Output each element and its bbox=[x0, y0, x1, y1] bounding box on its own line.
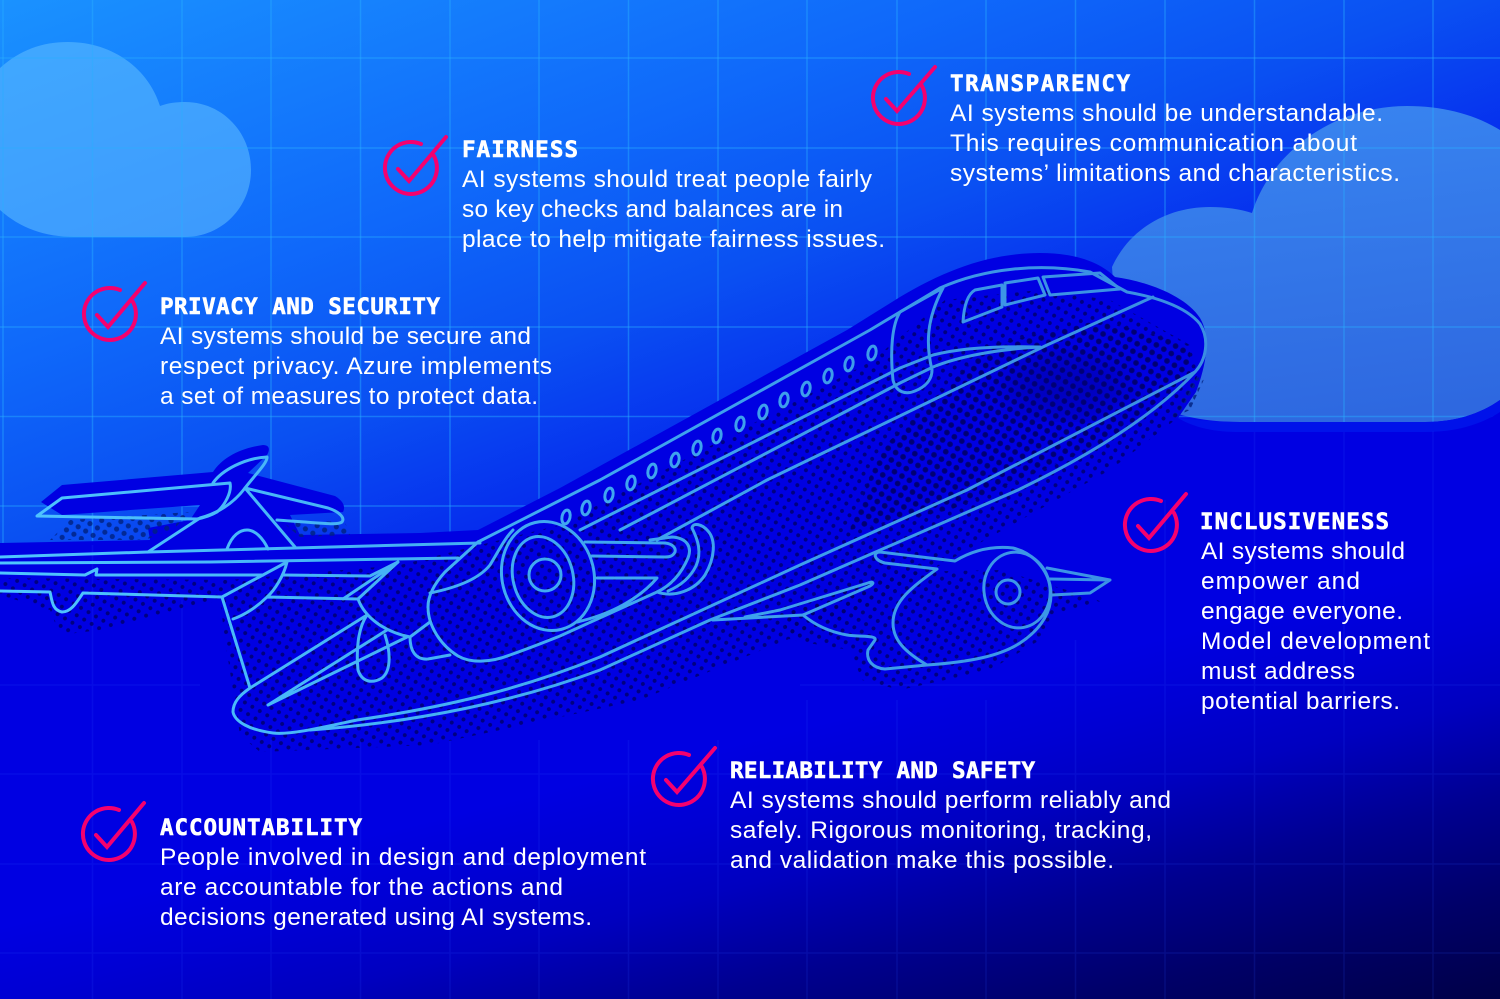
icon: check mark bbox=[1125, 494, 1186, 551]
text block: AI systems should perform reliably and bbox=[730, 787, 1171, 814]
right engine bbox=[875, 547, 1110, 665]
text block: must address bbox=[1201, 658, 1355, 685]
item: privacy and security bbox=[84, 283, 552, 410]
fuselage stringers bbox=[580, 297, 1153, 540]
text block: decisions generated using AI systems. bbox=[160, 904, 592, 931]
heading: PRIVACY AND SECURITY bbox=[160, 294, 440, 320]
cockpit windows bbox=[963, 273, 1120, 322]
text block: systems’ limitations and characteristics. bbox=[950, 160, 1400, 187]
airplane line drawing bbox=[0, 268, 1206, 733]
text block bbox=[160, 323, 552, 410]
halftone shadow bbox=[0, 290, 1206, 752]
text block bbox=[1201, 538, 1430, 715]
cloud: right bbox=[1112, 106, 1500, 422]
text block: respect privacy. Azure implements bbox=[160, 353, 552, 380]
icon: check mark bbox=[84, 283, 145, 340]
heading: TRANSPARENCY bbox=[950, 71, 1130, 97]
text block: place to help mitigate fairness issues. bbox=[462, 226, 885, 253]
passenger windows bbox=[561, 345, 877, 525]
icon: check mark bbox=[385, 137, 446, 194]
icon: check mark bbox=[83, 803, 144, 860]
item: inclusiveness bbox=[1125, 494, 1430, 715]
wing flap bbox=[713, 582, 927, 669]
tail bbox=[37, 457, 343, 552]
item: fairness bbox=[385, 137, 885, 253]
item: accountability bbox=[83, 803, 646, 931]
text block: AI systems should bbox=[1201, 538, 1405, 565]
lower hull lines bbox=[233, 372, 1195, 733]
heading: ACCOUNTABILITY bbox=[160, 815, 362, 841]
heading: FAIRNESS bbox=[462, 137, 578, 163]
heading: INCLUSIVENESS bbox=[1200, 509, 1389, 535]
text block: People involved in design and deployment bbox=[160, 844, 646, 871]
text block: safely. Rigorous monitoring, tracking, bbox=[730, 817, 1152, 844]
text block: AI systems should be understandable. bbox=[950, 100, 1383, 127]
text block: are accountable for the actions and bbox=[160, 874, 563, 901]
fuselage top line and nose bbox=[478, 268, 1206, 542]
left engine bbox=[428, 512, 713, 661]
text block: AI systems should be secure and bbox=[160, 323, 531, 350]
text block: a set of measures to protect data. bbox=[160, 383, 538, 410]
text block bbox=[730, 787, 1171, 874]
text block: AI systems should treat people fairly bbox=[462, 166, 873, 193]
heading: RELIABILITY AND SAFETY bbox=[730, 758, 1035, 784]
text block: Model development bbox=[1201, 628, 1430, 655]
text block: empower and bbox=[1201, 568, 1360, 595]
icon: check mark bbox=[653, 748, 715, 805]
text block: engage everyone. bbox=[1201, 598, 1403, 625]
text block: and validation make this possible. bbox=[730, 847, 1114, 874]
text block bbox=[462, 166, 885, 253]
text block: This requires communication about bbox=[950, 130, 1357, 157]
text block: so key checks and balances are in bbox=[462, 196, 843, 223]
text block bbox=[950, 100, 1400, 187]
text block bbox=[160, 844, 646, 931]
text block: potential barriers. bbox=[1201, 688, 1400, 715]
item: reliability and safety bbox=[653, 748, 1171, 874]
icon: check mark bbox=[873, 67, 935, 124]
lower sky and plane silhouette bbox=[0, 253, 1500, 999]
cloud: top left bbox=[0, 42, 251, 237]
door bbox=[892, 288, 943, 393]
rear fuselage and main wing bbox=[0, 543, 480, 705]
item: transparency bbox=[873, 67, 1400, 187]
